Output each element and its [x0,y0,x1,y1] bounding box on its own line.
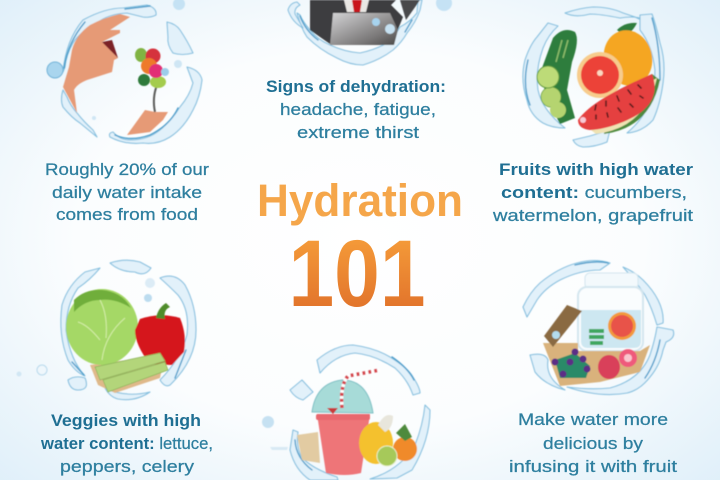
text: infused water: infusing it with fruit [509,457,677,476]
text: fruits: Fruits with high water [499,160,693,179]
panel: signs of dehydration [266,0,452,142]
text: signs of dehydration: headache, fatigue, [280,100,436,119]
icon: smoothie cup and citrus in water splash [262,345,430,480]
text: food water intake: Roughly 20% of our [45,160,209,179]
text: veggies: Veggies with high [51,411,201,430]
icon: person with laptop in water splash [288,0,452,65]
panel: infused water [509,260,677,476]
text: food water intake: comes from food [56,205,198,224]
text: veggies: peppers, celery [60,457,195,476]
text: fruits [492,160,693,225]
panel: food water intake [45,0,209,224]
icon: face and plant in water splash [47,0,202,143]
title: Hydration 101: 101 [288,221,426,327]
icon: cucumber, orange, grapefruit and watermelon in water splash [523,7,664,147]
text: food water intake: daily water intake [52,183,202,202]
text: fruits: content: cucumbers, [501,183,687,202]
text: infused water: Make water more [518,410,668,429]
text: veggies [40,411,213,476]
panel: veggies [16,260,213,476]
icon: fruit infused water jar in water splash [523,260,674,395]
text: veggies: water content: lettuce, [40,434,213,453]
panel: smoothie [262,345,430,480]
panel: fruits [492,7,693,225]
title: Hydration 101: Hydration [257,175,463,226]
text: signs of dehydration [266,77,446,142]
text: signs of dehydration: extreme thirst [297,123,419,142]
text: signs of dehydration: Signs of dehydration: [266,77,446,96]
text: fruits: watermelon, grapefruit [492,206,693,225]
icon: lettuce, pepper and celery in water splash [16,260,196,400]
text: infused water: delicious by [543,434,644,453]
text: infused water [509,410,677,476]
title: Hydration 101 [257,175,463,327]
text: food water intake [45,160,209,224]
